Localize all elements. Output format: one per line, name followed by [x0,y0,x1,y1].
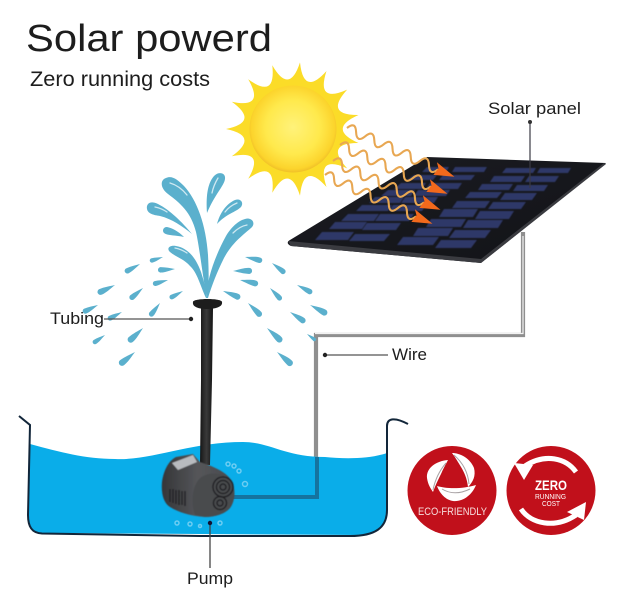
bottom cycle arrow [521,502,586,523]
pump front housing [193,474,234,517]
panel front edge [288,163,606,263]
bubbles [175,462,248,528]
water basin [19,416,408,536]
solar panel [288,157,606,263]
sun rays arrows [322,123,457,230]
water [28,442,387,535]
tubing [193,299,222,465]
cost text: COST [542,501,561,508]
label: solar panel [488,100,581,188]
label: pump [187,521,233,588]
spray droplets right [222,254,328,367]
central water streams [162,177,209,298]
badge: eco-friendly [408,446,496,535]
label: tubing [50,310,193,328]
sun rays [226,62,358,196]
recycling leaves [427,453,476,501]
sun [226,62,358,196]
pump label [172,455,197,470]
label: tubing: Tubing [50,310,104,328]
title: Solar powerd [26,18,272,60]
zero text: ZERO [535,477,567,493]
pump [162,454,234,517]
basin outline [19,416,408,536]
top cycle arrow [514,458,576,480]
highlights [155,178,247,253]
pump vents [170,489,185,506]
submerged wire [233,457,317,497]
wavy ray 3 [330,156,443,216]
label: wire: Wire [392,346,427,364]
eco-friendly text: ECO-FRIENDLY [418,506,488,518]
wire from solar panel to pump [315,232,523,457]
sun disc [250,86,336,172]
panel cells [315,167,571,248]
running text: RUNNING [535,494,566,501]
label: solar panel: Solar panel [488,100,581,118]
wavy ray 4 [322,170,435,230]
wavy ray 1 [344,123,457,183]
badge: zero running cost [506,446,596,535]
fountain [82,173,328,367]
pump body [162,454,234,517]
wavy ray 2 [337,140,450,200]
label: wire [323,346,427,364]
label: pump: Pump [187,570,233,588]
water drops [147,202,192,234]
panel frame [288,157,606,263]
subtitle: Zero running costs [30,68,210,91]
spray droplets left [82,255,184,367]
pump grille [213,477,233,510]
